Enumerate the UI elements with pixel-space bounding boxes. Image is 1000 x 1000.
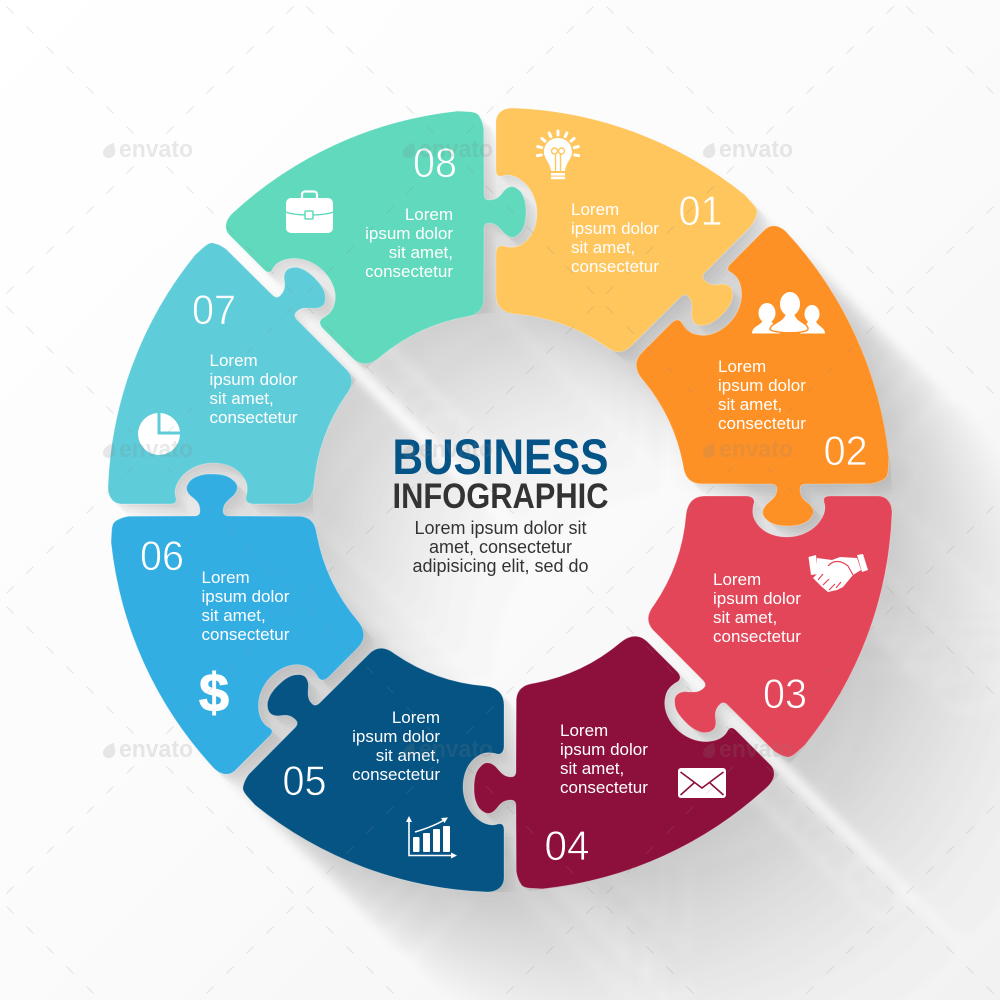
icon: envelope xyxy=(678,768,726,798)
description 06: consectetur xyxy=(202,625,290,644)
watermark grid: envato xyxy=(419,736,493,763)
number 03: 03 xyxy=(763,670,807,717)
description 04: sit amet, xyxy=(560,759,624,778)
description 06: ipsum dolor xyxy=(202,587,290,606)
icon: pie chart xyxy=(138,413,180,455)
watermark grid: envato xyxy=(719,436,793,463)
description 08: consectetur xyxy=(365,262,453,281)
description 03: consectetur xyxy=(713,627,801,646)
centre description: adipisicing elit, sed do xyxy=(412,556,589,576)
description 01: ipsum dolor xyxy=(571,219,659,238)
description 05: sit amet, xyxy=(376,746,440,765)
panel: step 08 xyxy=(220,41,577,398)
panel: step 05 xyxy=(243,648,504,892)
long shadow of the ring xyxy=(116,119,1000,1000)
centre title: business: BUSINESS xyxy=(392,429,608,485)
description 05: consectetur xyxy=(352,765,440,784)
panel: step 01 xyxy=(496,108,757,352)
watermark grid: envato xyxy=(119,436,193,463)
icon: bar chart xyxy=(406,816,457,858)
puzzle piece 05 xyxy=(243,648,504,892)
description 07: ipsum dolor xyxy=(210,370,298,389)
description 02: ipsum dolor xyxy=(718,376,806,395)
description 03: sit amet, xyxy=(713,608,777,627)
puzzle piece 07 xyxy=(108,243,352,504)
description 03: Lorem xyxy=(713,570,761,589)
watermark grid: envato xyxy=(719,136,793,163)
panel: step 04 xyxy=(423,602,780,959)
description 07: consectetur xyxy=(210,408,298,427)
number 08: 08 xyxy=(413,139,457,186)
description 01: Lorem xyxy=(571,200,619,219)
centre description: amet, consectetur xyxy=(429,537,572,557)
description 08: sit amet, xyxy=(389,243,453,262)
icon: dollar: $ xyxy=(199,663,229,723)
description 06: Lorem xyxy=(202,568,250,587)
icon: handshake xyxy=(808,554,868,592)
puzzle piece 03 xyxy=(648,496,892,757)
puzzle piece 02 xyxy=(602,220,959,577)
description 04: ipsum dolor xyxy=(560,740,648,759)
description 05: Lorem xyxy=(392,708,440,727)
watermark grid: envato xyxy=(419,136,493,163)
watermark grid: envato xyxy=(719,736,793,763)
description 02: Lorem xyxy=(718,357,766,376)
number 05: 05 xyxy=(282,757,326,804)
description 01: sit amet, xyxy=(571,238,635,257)
number 02: 02 xyxy=(824,427,868,474)
watermark grid: envato xyxy=(119,136,193,163)
puzzle piece 01 xyxy=(496,108,757,352)
description 02: sit amet, xyxy=(718,395,782,414)
puzzle piece 04 xyxy=(423,602,780,959)
description 04: Lorem xyxy=(560,721,608,740)
centre description: Lorem ipsum dolor sit xyxy=(414,518,587,538)
panel: step 02 xyxy=(602,220,959,577)
puzzle piece 08 xyxy=(220,41,577,398)
centre title: infographic: INFOGRAPHIC xyxy=(392,476,608,516)
icon: people xyxy=(752,292,825,334)
description 03: ipsum dolor xyxy=(713,589,801,608)
description 08: Lorem xyxy=(405,205,453,224)
panel: step 03 xyxy=(648,496,892,757)
number 01: 01 xyxy=(678,187,722,234)
description 04: consectetur xyxy=(560,778,648,797)
watermark grid xyxy=(103,136,793,763)
panel: step 06 xyxy=(41,423,398,780)
description 02: consectetur xyxy=(718,414,806,433)
number 07: 07 xyxy=(192,286,236,333)
number 06: 06 xyxy=(140,532,184,579)
panel: step 07 xyxy=(108,243,352,504)
watermark grid: envato xyxy=(419,436,493,463)
watermark grid: envato xyxy=(119,736,193,763)
icon: briefcase xyxy=(286,191,333,233)
number 04: 04 xyxy=(544,822,590,869)
description 07: sit amet, xyxy=(210,389,274,408)
description 08: ipsum dolor xyxy=(365,224,453,243)
description 06: sit amet, xyxy=(202,606,266,625)
description 01: consectetur xyxy=(571,257,659,276)
puzzle piece 06 xyxy=(41,423,398,780)
description 07: Lorem xyxy=(210,351,258,370)
icon: light bulb xyxy=(537,131,579,179)
description 05: ipsum dolor xyxy=(352,727,440,746)
